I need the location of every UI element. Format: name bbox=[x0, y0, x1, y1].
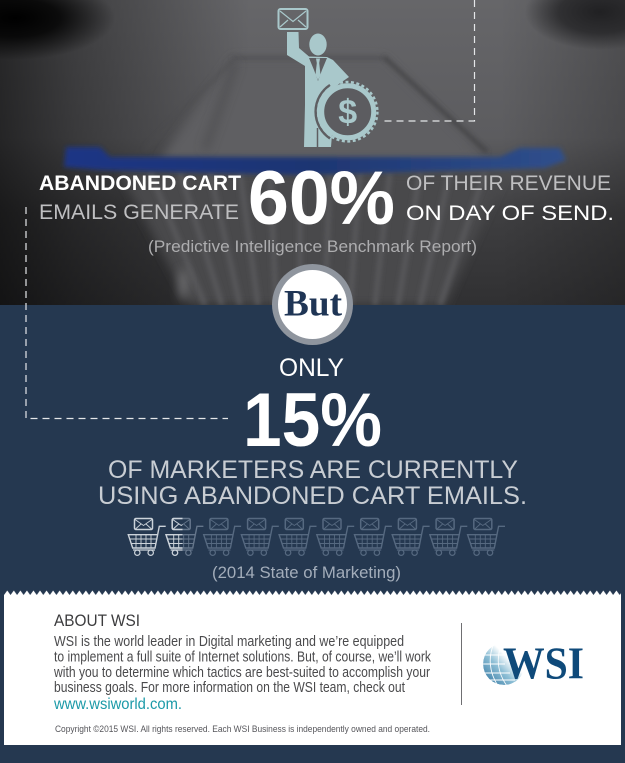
source: state of marketing: (2014 State of Marketing) bbox=[212, 563, 401, 582]
text: only: ONLY bbox=[279, 354, 344, 382]
dashed connector: left side to 15% bbox=[26, 207, 228, 418]
cart 4 bbox=[241, 518, 279, 555]
navy lower section background bbox=[0, 305, 625, 763]
cart 1 highlighted bbox=[128, 518, 166, 555]
cart 5 bbox=[279, 518, 316, 555]
text: abandoned cart: ABANDONED CART bbox=[39, 172, 241, 195]
text: emails generate: EMAILS GENERATE bbox=[39, 201, 239, 224]
cart 2 highlighted half bbox=[165, 518, 182, 556]
icon: dollar gear coin: $ bbox=[338, 94, 357, 132]
cart 9 bbox=[430, 518, 467, 555]
cart interior bbox=[163, 100, 470, 158]
source: predictive intelligence: (Predictive Intelligence Benchmark Report) bbox=[148, 237, 477, 256]
photo background: blurred shopping cart bbox=[0, 0, 625, 305]
logo: WSI: WSI bbox=[503, 638, 584, 688]
badge: But: But bbox=[284, 284, 343, 324]
text: copyright: Copyright ©2015 WSI. All rights reserved. Each WSI Business is independently owned and operated. bbox=[55, 724, 430, 735]
logo: WSI bbox=[483, 646, 583, 685]
divider bbox=[461, 623, 462, 705]
number: 60 percent: 60% bbox=[248, 156, 395, 241]
cart 6 bbox=[317, 518, 354, 555]
cart 7 bbox=[354, 518, 392, 555]
cart 2 dim base bbox=[166, 518, 203, 555]
text: of their revenue: OF THEIR REVENUE bbox=[406, 172, 611, 195]
icon: businessman holding envelope and dollar coin bbox=[278, 9, 377, 147]
icon row: ten carts with envelopes, 1.5 highlighted bbox=[128, 518, 505, 555]
dashed connector: icon to top edge bbox=[383, 0, 474, 121]
text: about body: WSI is the world leader in Digital marketing and we’re equipped bbox=[54, 634, 404, 650]
number: 15 percent: 15% bbox=[243, 378, 382, 463]
cart 10 bbox=[468, 518, 505, 555]
text: of marketers are currently: OF MARKETERS ARE CURRENTLY bbox=[108, 456, 518, 484]
cart lower body bbox=[120, 172, 505, 305]
heading: about WSI: ABOUT WSI bbox=[54, 612, 140, 630]
dark corners bbox=[0, 0, 107, 54]
cart 3 bbox=[204, 518, 241, 555]
text: on day of send: ON DAY OF SEND. bbox=[406, 202, 614, 225]
text: about body: with you to determine which tactics are best-suited to accomplish your bbox=[53, 665, 430, 681]
icon: envelope bbox=[278, 9, 308, 29]
text: about body bbox=[53, 634, 432, 696]
headline: abandoned cart stat bbox=[39, 156, 614, 241]
text: about body: business goals. For more information on the WSI team, check out bbox=[54, 680, 405, 696]
badge: But bbox=[272, 264, 353, 345]
text: using abandoned cart emails: USING ABANDONED CART EMAILS. bbox=[98, 482, 527, 510]
panel: about WSI bbox=[4, 590, 621, 745]
logo globe bbox=[483, 646, 522, 685]
icon: person bbox=[287, 32, 349, 147]
cart 8 bbox=[392, 518, 430, 555]
text: about body: to implement a full suite of Internet solutions. But, of course, we’ll work bbox=[54, 650, 432, 666]
blue handle bbox=[64, 147, 566, 175]
link: website: www.wsiworld.com. bbox=[53, 696, 182, 713]
